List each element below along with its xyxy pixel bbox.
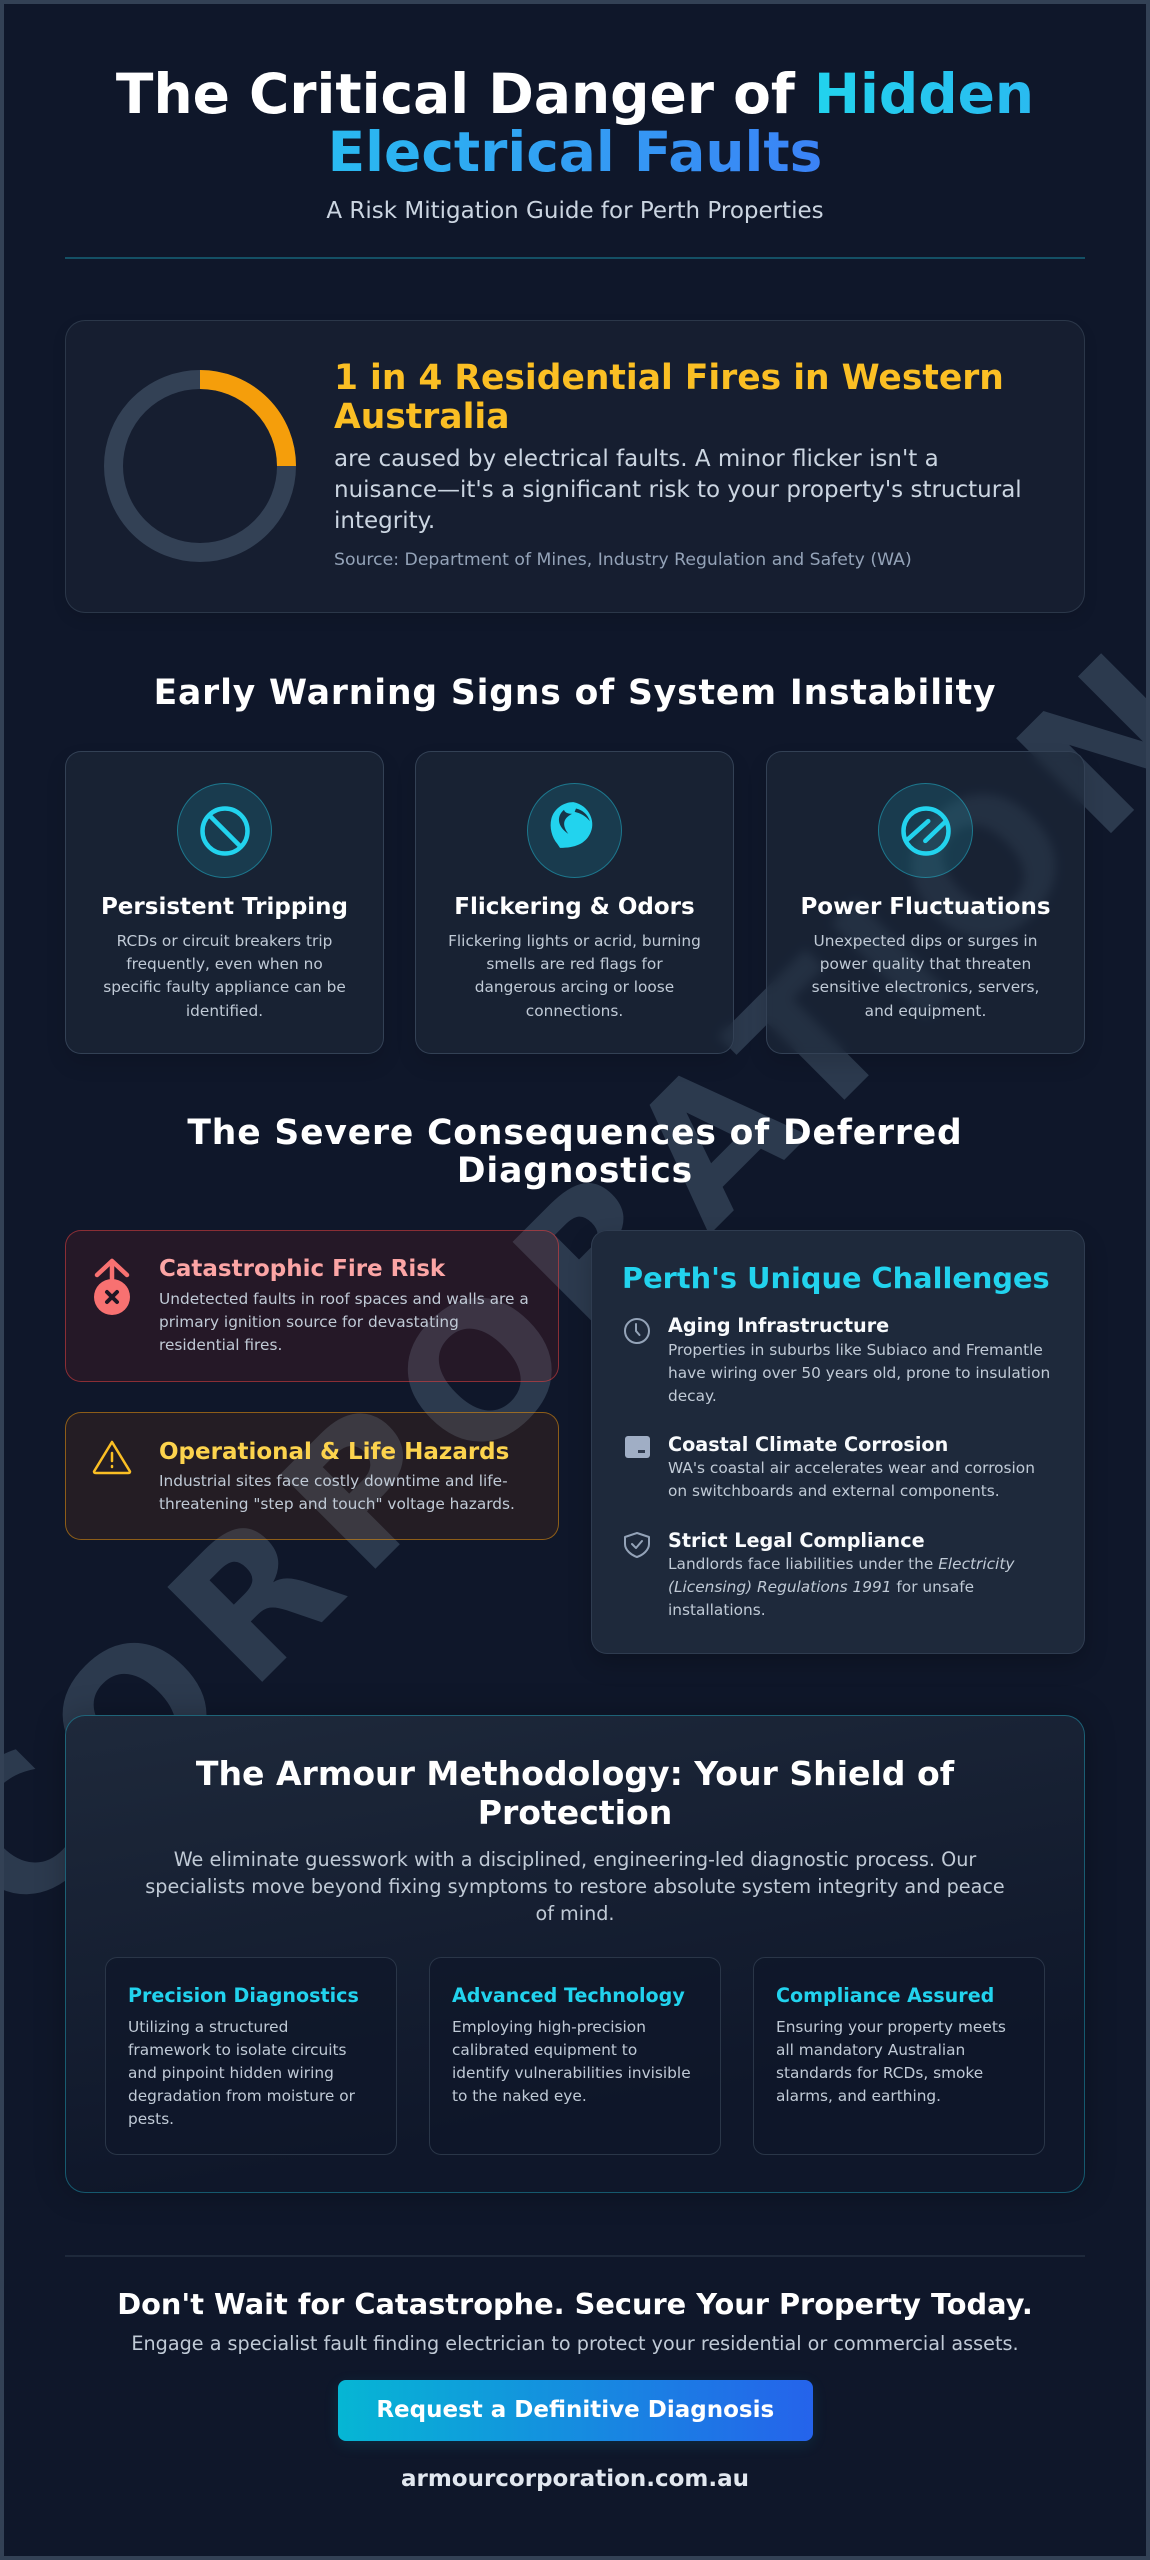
card text: specific faulty appliance can be	[103, 978, 346, 996]
card: precision diagnostics	[104, 1957, 397, 2155]
card text	[776, 2018, 1006, 2105]
heading: severe consequences: The Severe Consequences of Deferred	[187, 1113, 963, 1153]
panel intro: of mind.	[535, 1902, 615, 1925]
panel: power fluctuations	[766, 751, 1085, 1054]
panel: flickering and odors	[415, 751, 734, 1054]
card title: Power Fluctuations	[800, 894, 1051, 920]
item text	[668, 1459, 1035, 1500]
card text	[448, 932, 701, 1020]
panel heading: Perth's Unique Challenges	[622, 1261, 1050, 1295]
card text: frequently, even when no	[126, 955, 323, 973]
icon: switchboard	[625, 1436, 650, 1458]
card text	[103, 932, 346, 1020]
statistic description: are caused by electrical faults. A minor flicker isn't a	[334, 446, 939, 472]
card text	[159, 1472, 515, 1513]
card text: all mandatory Australian	[776, 2041, 965, 2059]
panel heading: Protection	[478, 1793, 672, 1832]
icon: ban	[177, 783, 272, 878]
card text	[159, 1290, 529, 1354]
panel intro: We eliminate guesswork with a disciplined, engineering-led diagnostic process. Our	[174, 1848, 976, 1871]
card text: power quality that threaten	[820, 955, 1031, 973]
card text	[452, 2018, 691, 2105]
panel heading	[196, 1754, 954, 1832]
panel heading: The Armour Methodology: Your Shield of	[196, 1754, 954, 1793]
item: coastal climate corrosion	[625, 1433, 1035, 1500]
icon: flame swirl	[527, 783, 622, 878]
card text: standards for RCDs, smoke	[776, 2064, 983, 2082]
item text	[668, 1341, 1050, 1405]
card text	[128, 2018, 355, 2128]
panel: key statistic	[65, 320, 1085, 613]
footer divider	[65, 2255, 1085, 2257]
item text: WA's coastal air accelerates wear and corrosion	[668, 1459, 1035, 1477]
item text: (Licensing) Regulations 1991 for unsafe	[668, 1578, 974, 1596]
item text: decay.	[668, 1387, 717, 1405]
card text: Unexpected dips or surges in	[814, 932, 1037, 950]
card text: dangerous arcing or loose	[475, 978, 674, 996]
statistic heading: Australia	[334, 397, 510, 437]
card text: Industrial sites face costly downtime and life-	[159, 1472, 508, 1490]
item: aging infrastructure	[624, 1314, 1050, 1405]
website: armourcorporation.com.au	[401, 2466, 749, 2492]
card title: Operational & Life Hazards	[159, 1439, 509, 1465]
source: Source: Department of Mines, Industry Regulation and Safety (WA)	[334, 550, 912, 570]
card text: RCDs or circuit breakers trip	[117, 932, 332, 950]
subtitle: A Risk Mitigation Guide for Perth Properties	[326, 198, 824, 224]
card text: calibrated equipment to	[452, 2041, 637, 2059]
panel: Perth's unique challenges	[591, 1230, 1085, 1654]
item text: on switchboards and external components.	[668, 1482, 1000, 1500]
heading: severe consequences	[187, 1113, 963, 1191]
card title: Catastrophic Fire Risk	[159, 1256, 445, 1282]
card text: residential fires.	[159, 1336, 282, 1354]
card text: Ensuring your property meets	[776, 2018, 1006, 2036]
item title: Strict Legal Compliance	[668, 1529, 925, 1552]
card text: identify vulnerabilities invisible	[452, 2064, 691, 2082]
item text: installations.	[668, 1601, 766, 1619]
card title: Precision Diagnostics	[128, 1984, 359, 2007]
statistic description: integrity.	[334, 508, 435, 534]
card text: and pinpoint hidden wiring	[128, 2064, 334, 2082]
panel: the Armour methodology	[65, 1715, 1085, 2193]
card title: Persistent Tripping	[101, 894, 348, 920]
card text: pests.	[128, 2110, 174, 2128]
icon: slashed circle	[878, 783, 973, 878]
card text: framework to isolate circuits	[128, 2041, 347, 2059]
card text: threatening "step and touch" voltage hazards.	[159, 1495, 515, 1513]
card: advanced technology	[428, 1957, 721, 2155]
panel: catastrophic fire risk	[65, 1230, 559, 1382]
item title: Coastal Climate Corrosion	[668, 1433, 948, 1456]
panel: operational and life hazards	[65, 1412, 559, 1540]
card text: primary ignition source for devastating	[159, 1313, 459, 1331]
panel intro	[145, 1848, 1005, 1925]
card title: Advanced Technology	[452, 1984, 685, 2007]
card text: to the naked eye.	[452, 2087, 587, 2105]
heading: severe consequences: Diagnostics	[457, 1151, 693, 1191]
statistic heading: 1 in 4 Residential Fires in Western	[334, 358, 1004, 398]
title: The Critical Danger of Hidden	[116, 62, 1034, 126]
icon: clock	[624, 1318, 650, 1344]
card title: Compliance Assured	[776, 1984, 994, 2007]
statistic description	[334, 446, 1022, 534]
icon: fire risk	[94, 1258, 130, 1315]
donut chart: 1 in 4	[104, 370, 296, 562]
icon: warning triangle	[92, 1440, 132, 1474]
card text: Employing high-precision	[452, 2018, 646, 2036]
card text: and equipment.	[865, 1002, 986, 1020]
card title: Flickering & Odors	[454, 894, 695, 920]
card text	[812, 932, 1039, 1020]
item text: Landlords face liabilities under the Electricity	[668, 1555, 1014, 1573]
heading: early warning signs: Early Warning Signs of System Instability	[154, 672, 996, 712]
statistic description: nuisance—it's a significant risk to your property's structural	[334, 476, 1022, 502]
card text: Flickering lights or acrid, burning	[448, 932, 701, 950]
call to action text: Engage a specialist fault finding electrician to protect your residential or commercial assets.	[131, 2332, 1019, 2354]
card text: connections.	[526, 1002, 623, 1020]
item text: Properties in suburbs like Subiaco and Fremantle	[668, 1341, 1043, 1359]
card text: Utilizing a structured	[128, 2018, 288, 2036]
card text: sensitive electronics, servers,	[812, 978, 1039, 996]
header divider	[65, 257, 1085, 259]
panel intro: specialists move beyond fixing symptoms to restore absolute system integrity and peace	[145, 1875, 1005, 1898]
item title: Aging Infrastructure	[668, 1314, 889, 1336]
card: compliance assured	[752, 1957, 1045, 2155]
panel: persistent tripping	[65, 751, 384, 1054]
item: strict legal compliance	[624, 1529, 1015, 1619]
icon: shield check	[624, 1532, 650, 1558]
button: request a definitive diagnosis	[338, 2380, 813, 2441]
call to action heading: Don't Wait for Catastrophe. Secure Your Property Today.	[117, 2287, 1033, 2321]
card text: alarms, and earthing.	[776, 2087, 941, 2105]
card text: identified.	[186, 1002, 263, 1020]
card text: degradation from moisture or	[128, 2087, 355, 2105]
item text: have wiring over 50 years old, prone to insulation	[668, 1364, 1050, 1382]
title: Electrical Faults	[328, 120, 822, 184]
title	[116, 62, 1034, 184]
card text: Undetected faults in roof spaces and walls are a	[159, 1290, 529, 1308]
card text: smells are red flags for	[486, 955, 663, 973]
button: request a definitive diagnosis: Request a Definitive Diagnosis	[376, 2397, 774, 2423]
item text	[668, 1555, 1015, 1619]
statistic heading	[334, 358, 1004, 437]
